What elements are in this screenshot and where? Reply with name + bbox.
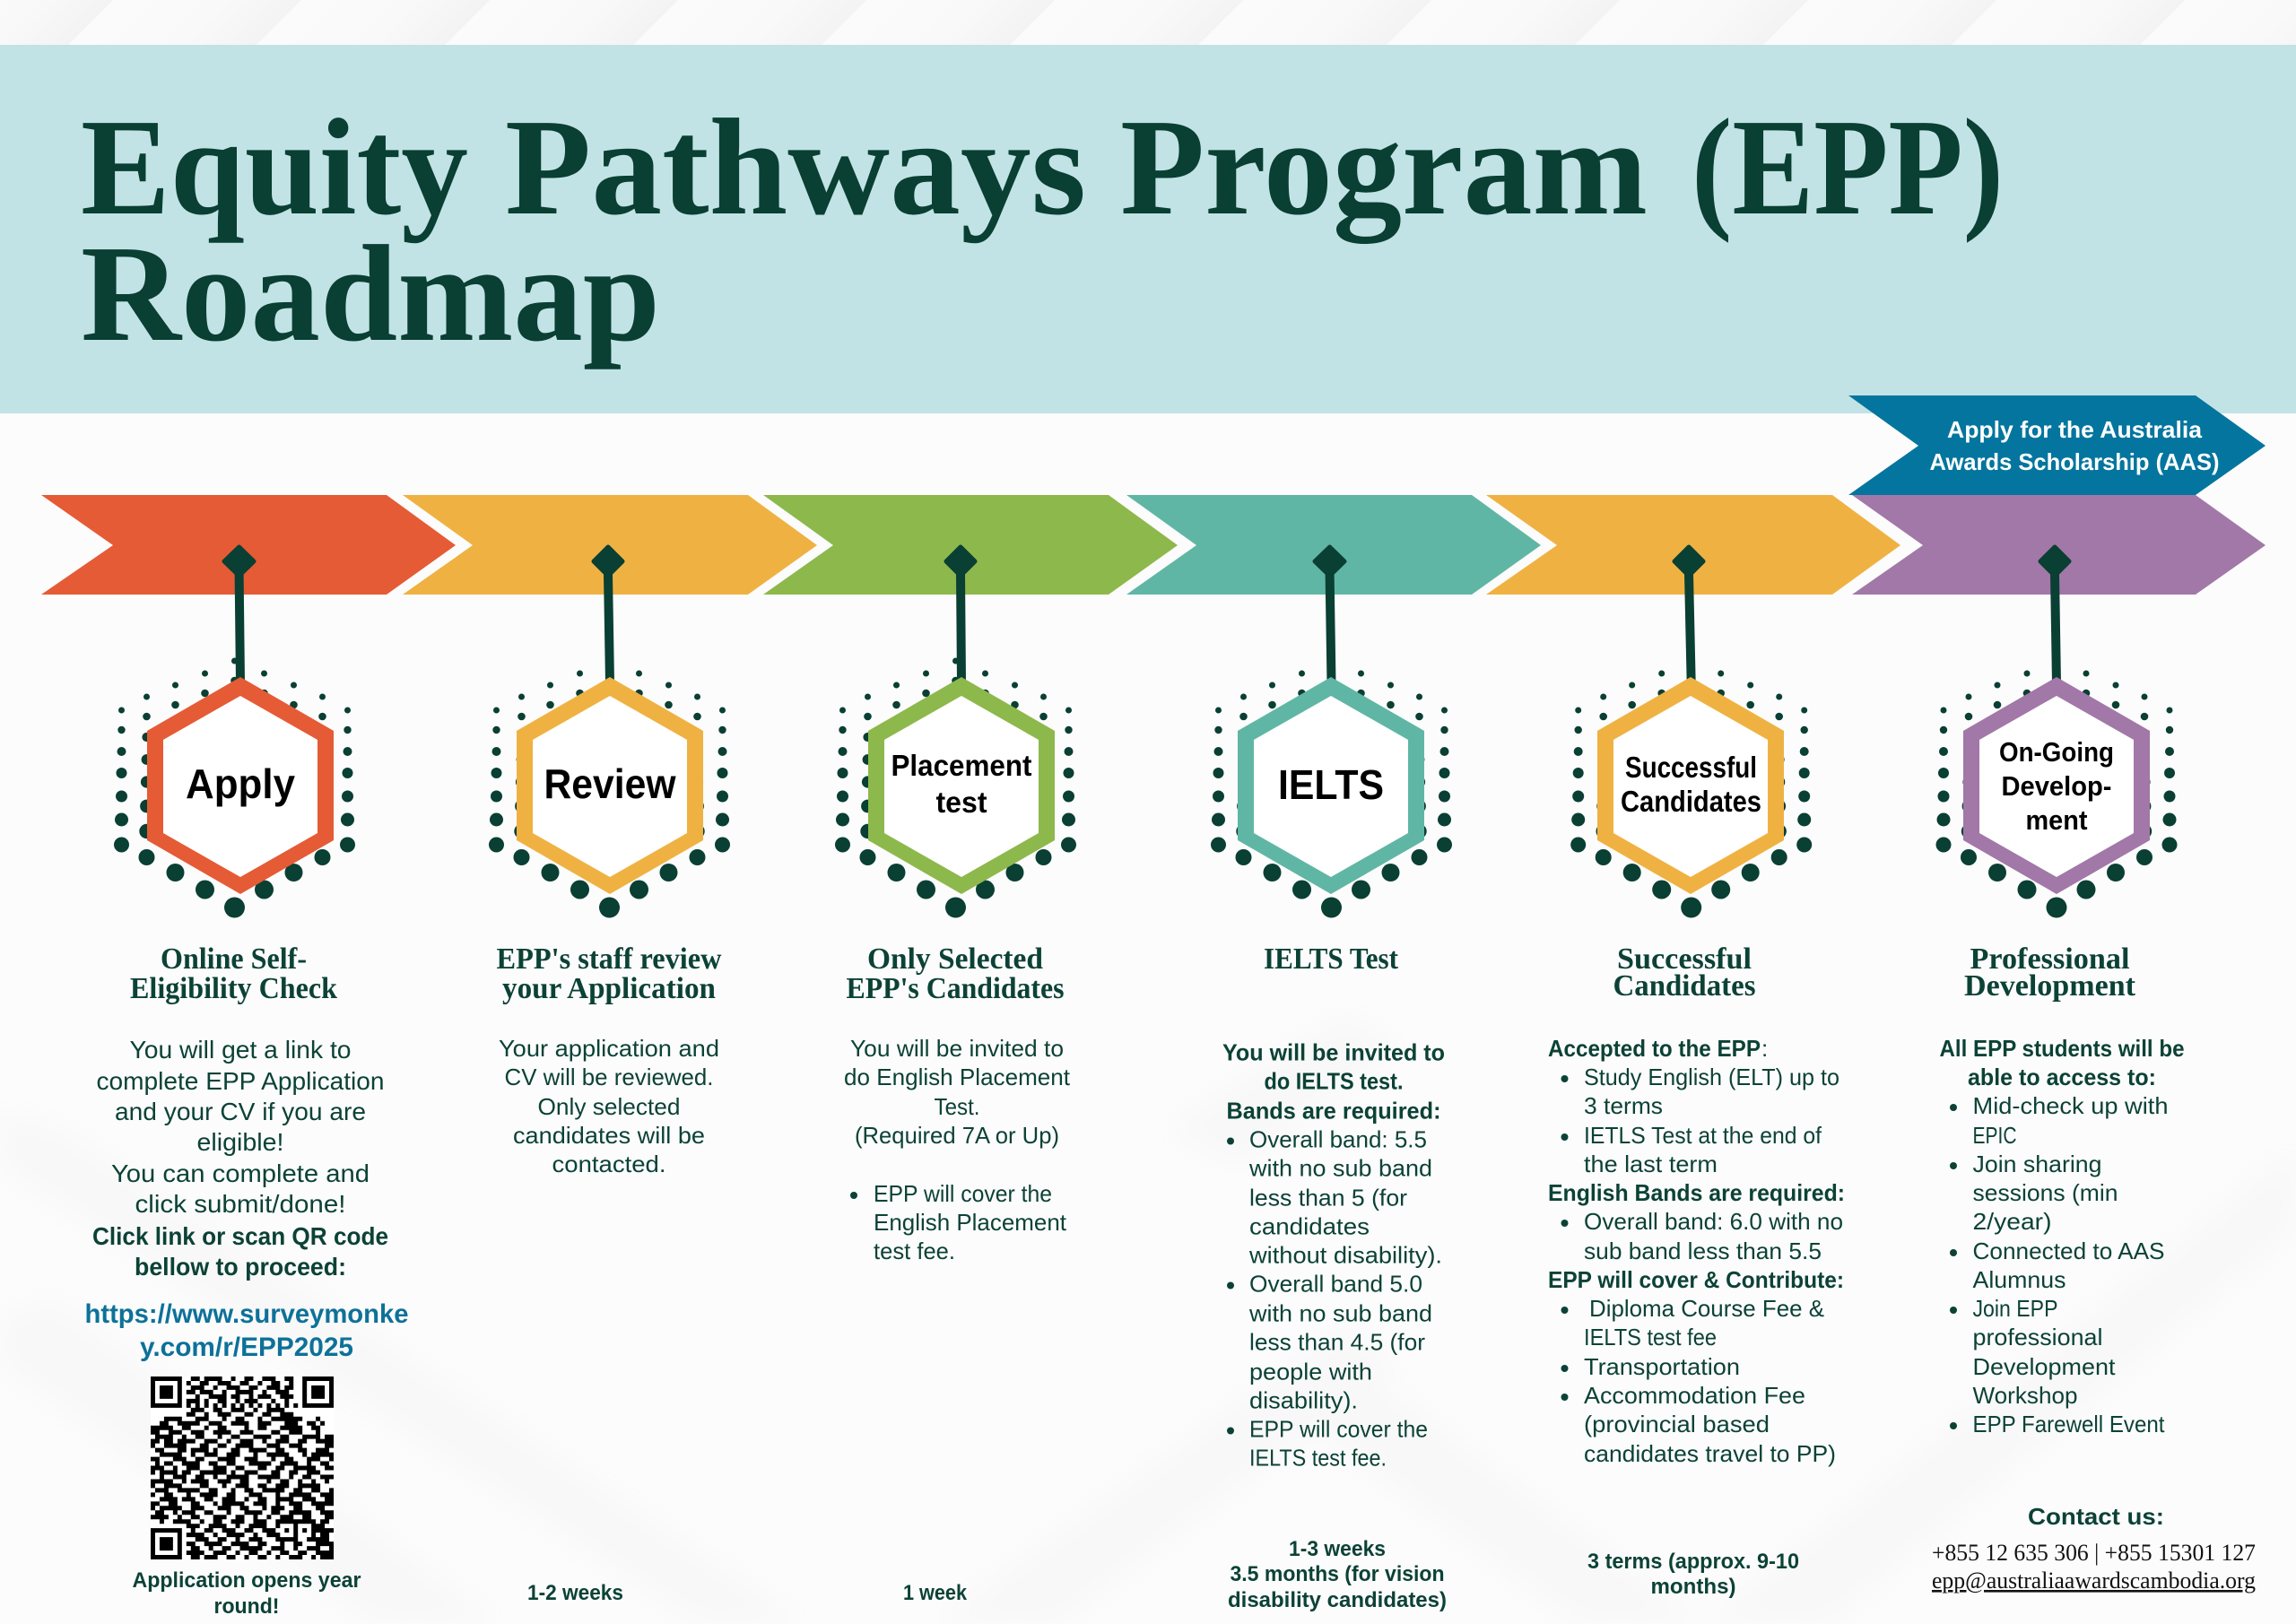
- body text: without disability).: [1248, 1241, 1442, 1268]
- hexagon label: Review: [544, 760, 676, 807]
- pin: [1674, 547, 1703, 683]
- body text: sessions (min: [1973, 1179, 2118, 1206]
- title: [81, 91, 2004, 370]
- heading: your Application: [502, 972, 716, 1005]
- contact block: +855 12 635 306 | +855 15301 127: [1932, 1540, 2256, 1566]
- body text: (provincial based: [1584, 1411, 1770, 1437]
- body text: do English Placement: [844, 1064, 1071, 1090]
- dot halo: [489, 658, 730, 918]
- body text: test fee.: [874, 1238, 955, 1264]
- step 2: Review: [489, 547, 730, 1605]
- body text: Bands are required:: [1227, 1098, 1440, 1125]
- hexagon label: Successful: [1625, 751, 1757, 784]
- heading: Eligibility Check: [130, 972, 337, 1005]
- body text: CV will be reviewed.: [504, 1064, 714, 1090]
- heading: [1964, 942, 2136, 1003]
- body text: [1222, 1038, 1445, 1471]
- link: https://www.surveymonke: [84, 1299, 409, 1329]
- body text: [92, 1036, 388, 1281]
- body text: You can complete and: [111, 1159, 370, 1187]
- contact block: [1932, 1503, 2256, 1594]
- step 3: Placement test: [835, 547, 1076, 1605]
- heading: Online Self-: [161, 942, 307, 976]
- body text: IELTS test fee.: [1249, 1444, 1387, 1471]
- body text: Connected to AAS: [1973, 1238, 2165, 1264]
- step 6: On-Going Development: [1932, 547, 2256, 1594]
- body text: with no sub band: [1248, 1155, 1432, 1182]
- pin: [224, 547, 254, 683]
- heading: Successful: [1617, 942, 1752, 976]
- duration: 1-3 weeks: [1289, 1537, 1386, 1561]
- duration: 1 week: [903, 1581, 968, 1605]
- hexagon label: Candidates: [1621, 785, 1761, 818]
- pin: [2040, 547, 2069, 683]
- duration: [1228, 1537, 1447, 1612]
- duration: 3 terms (approx. 9-10: [1587, 1550, 1799, 1574]
- arrow: Apply for the Australia Awards Scholarship: Apply for the Australia: [1947, 416, 2203, 443]
- body text: EPP Farewell Event: [1973, 1411, 2165, 1437]
- body text: Click link or scan QR code: [92, 1222, 388, 1250]
- heading: Professional: [1970, 942, 2129, 976]
- body text: 2/year): [1973, 1208, 2052, 1235]
- body text: Only selected: [538, 1093, 680, 1120]
- arrow: Apply for the Australia Awards Scholarship: [1848, 395, 2266, 495]
- body text: IELTS test fee: [1584, 1324, 1717, 1350]
- duration: [1587, 1550, 1799, 1599]
- body text: candidates travel to PP): [1584, 1440, 1836, 1467]
- body text: less than 4.5 (for: [1249, 1329, 1425, 1356]
- hexagon label: test: [936, 786, 987, 819]
- heading: [130, 942, 337, 1005]
- timeline chevrons: [41, 495, 2266, 595]
- pin: [946, 547, 975, 683]
- dot halo: [1211, 658, 1452, 918]
- body text: Test.: [935, 1093, 979, 1120]
- body text: complete EPP Application: [97, 1067, 384, 1095]
- duration: disability candidates): [1228, 1588, 1447, 1612]
- body text: English Bands are required:: [1548, 1179, 1845, 1206]
- body text: Study English (ELT) up to: [1584, 1064, 1839, 1090]
- hexagon: [517, 677, 703, 894]
- body text: Development: [1973, 1353, 2116, 1380]
- duration note: [133, 1568, 361, 1619]
- hexagon: [1963, 677, 2150, 894]
- body text: [844, 1035, 1071, 1264]
- body text: 3 terms: [1584, 1092, 1663, 1119]
- body text: with no sub band: [1248, 1300, 1432, 1327]
- hexagon: [868, 677, 1055, 894]
- title: Program: [1120, 91, 1648, 244]
- heading: Candidates: [1613, 969, 1756, 1003]
- dot halo: [835, 658, 1076, 918]
- duration: months): [1650, 1575, 1736, 1599]
- hexagon label: Apply: [186, 760, 295, 807]
- body text: and your CV if you are: [115, 1098, 366, 1125]
- body text: do IELTS test.: [1265, 1067, 1403, 1094]
- pin: [594, 547, 622, 683]
- hexagon label: [1621, 751, 1761, 818]
- title: Roadmap: [81, 218, 660, 370]
- hexagon label: On-Going: [1999, 736, 2114, 768]
- duration note: Application opens year: [133, 1568, 361, 1593]
- body text: You will be invited to: [850, 1035, 1064, 1062]
- body text: (Required 7A or Up): [855, 1122, 1059, 1149]
- step 1: Apply: [84, 547, 409, 1619]
- step 5: Successful Candidates: [1548, 547, 1845, 1599]
- heading: [497, 942, 722, 1005]
- body text: Overall band: 6.0 with no: [1584, 1208, 1843, 1235]
- title: Equity: [81, 91, 468, 244]
- body text: Join EPP: [1973, 1295, 2057, 1322]
- link: [84, 1299, 409, 1362]
- body text: eligible!: [197, 1128, 283, 1156]
- body text: the last term: [1584, 1151, 1718, 1177]
- hexagon label: Develop-: [2002, 770, 2111, 802]
- body text: Transportation: [1584, 1353, 1740, 1380]
- duration: 1-2 weeks: [527, 1581, 623, 1605]
- heading: [1613, 942, 1756, 1003]
- body text: Alumnus: [1973, 1266, 2066, 1293]
- body text: candidates will be: [513, 1122, 705, 1149]
- body text: Join sharing: [1973, 1151, 2102, 1177]
- title banner: [0, 45, 2296, 413]
- heading: Only Selected: [867, 942, 1043, 976]
- QR code: [151, 1376, 334, 1559]
- body text: Overall band: 5.5: [1249, 1126, 1427, 1153]
- body text: [1939, 1035, 2185, 1437]
- body text: sub band less than 5.5: [1584, 1238, 1822, 1264]
- pin: [1315, 547, 1344, 683]
- body text: candidates: [1249, 1212, 1370, 1239]
- body text: All EPP students will be: [1939, 1035, 2185, 1062]
- body text: You will get a link to: [129, 1036, 352, 1064]
- hexagon label: IELTS: [1278, 761, 1384, 808]
- arrow: Apply for the Australia Awards Scholarship: Awards Scholarship (AAS): [1930, 448, 2219, 475]
- body text: [499, 1035, 719, 1177]
- title: Pathways: [505, 91, 1086, 244]
- hexagon: [1238, 677, 1424, 894]
- body text: people with: [1249, 1358, 1372, 1385]
- body text: IETLS Test at the end of: [1584, 1122, 1822, 1149]
- heading: IELTS Test: [1264, 942, 1399, 976]
- hexagon label: [891, 749, 1031, 819]
- heading: [847, 942, 1064, 1005]
- body text: Mid-check up with: [1973, 1092, 2169, 1119]
- body text: Workshop: [1973, 1382, 2077, 1409]
- body text: EPP will cover & Contribute:: [1548, 1266, 1844, 1293]
- heading: Development: [1964, 969, 2136, 1003]
- step 4: IELTS: [1211, 547, 1452, 1612]
- hexagon label: [1999, 736, 2114, 836]
- body text: bellow to proceed:: [135, 1253, 346, 1281]
- body text: EPIC: [1973, 1122, 2016, 1149]
- heading: EPP's Candidates: [847, 972, 1064, 1005]
- body text: Overall band 5.0: [1249, 1270, 1422, 1297]
- body text: Your application and: [499, 1035, 719, 1062]
- body text: able to access to:: [1968, 1064, 2156, 1090]
- body text: Accommodation Fee: [1584, 1382, 1805, 1409]
- body text: contacted.: [552, 1151, 665, 1177]
- body text: EPP will cover the: [1249, 1415, 1428, 1442]
- duration: 3.5 months (for vision: [1231, 1562, 1444, 1586]
- contact block: epp@australiaawardscambodia.org: [1932, 1568, 2256, 1594]
- hexagon label: ment: [2025, 804, 2088, 836]
- contact block: Contact us:: [2028, 1503, 2164, 1530]
- body text: professional: [1973, 1324, 2102, 1350]
- dot halo: [1935, 658, 2178, 918]
- body text: You will be invited to: [1222, 1038, 1445, 1065]
- dot halo: [114, 658, 355, 918]
- link: y.com/r/EPP2025: [140, 1333, 353, 1362]
- title: (EPP): [1692, 91, 2004, 244]
- hexagon: [1597, 677, 1784, 894]
- body text: Accepted to the EPP: [1548, 1035, 1761, 1062]
- hexagon: [147, 677, 334, 894]
- hexagon label: Placement: [891, 749, 1031, 782]
- body text: click submit/done!: [135, 1190, 346, 1218]
- heading: EPP's staff review: [497, 942, 722, 976]
- body text: :: [1761, 1035, 1768, 1062]
- body text: less than 5 (for: [1249, 1184, 1407, 1211]
- body text: disability).: [1249, 1386, 1358, 1413]
- body text: Diploma Course Fee &: [1589, 1295, 1824, 1322]
- duration note: round!: [213, 1594, 280, 1619]
- body text: English Placement: [874, 1209, 1067, 1236]
- body text: [1548, 1035, 1845, 1467]
- body text: EPP will cover the: [874, 1180, 1052, 1207]
- dot halo: [1570, 658, 1812, 918]
